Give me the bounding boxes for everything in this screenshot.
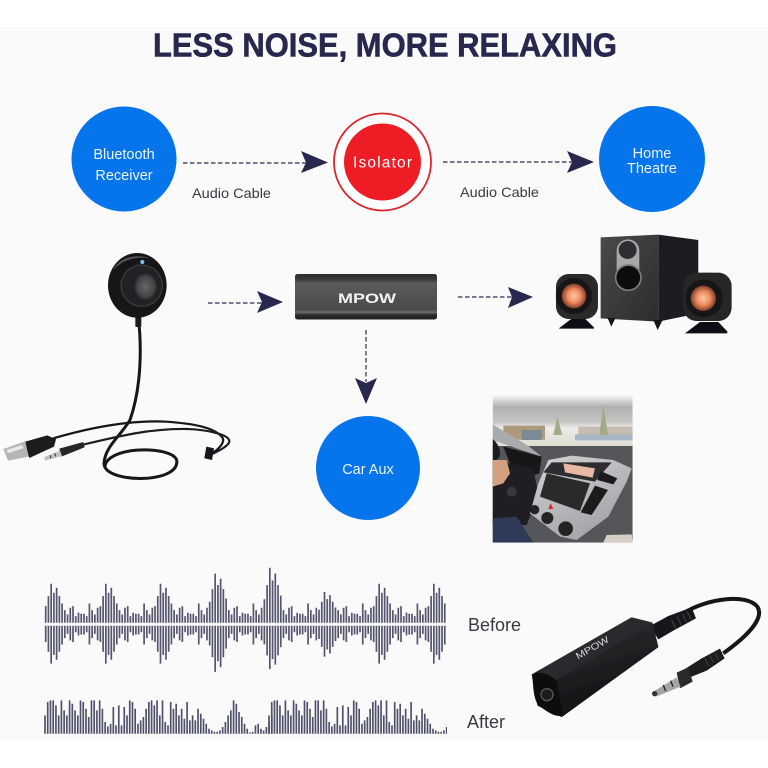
logo: MPOW: MPOW [338,290,397,306]
arrow: receiver to isolator device [208,291,283,313]
node: Bluetooth Receiver [72,106,176,212]
node: Isolator: Isolator [353,154,412,172]
waveform top half [46,568,445,623]
photo: MPOW isolator box [295,274,437,320]
label: After: After [467,712,505,732]
photo: speaker set [556,235,732,333]
title: LESS NOISE, MORE RELAXING [153,26,617,64]
node: Car Aux: Car Aux [342,462,395,478]
photo: car dashboard [493,395,633,543]
node: Bluetooth Receiver: Bluetooth [93,147,155,163]
label: audio cable right: Audio Cable [460,184,539,200]
node: Bluetooth Receiver: Receiver [95,168,153,184]
label: audio cable left: Audio Cable [192,185,271,201]
node: Home Theatre: Home [633,146,671,162]
node: Car Aux [316,416,420,520]
label: Before: Before [468,615,521,635]
photo: isolator with jack [533,599,759,716]
arrow: isolator to speakers [458,287,533,308]
arrow: isolator to home theatre [443,151,594,173]
chart: after waveform [45,700,496,734]
arrow: isolator down to car aux [355,330,377,404]
logo: Mpow: MPOW [574,634,611,661]
arrow: receiver to isolator [183,151,328,173]
node: Isolator [334,114,431,210]
chart: before waveform [46,568,445,672]
photo: bluetooth receiver with cables [3,253,229,478]
waveform bottom half [46,626,445,672]
node: Home Theatre [599,106,705,212]
node: Home Theatre: Theatre [627,161,677,177]
